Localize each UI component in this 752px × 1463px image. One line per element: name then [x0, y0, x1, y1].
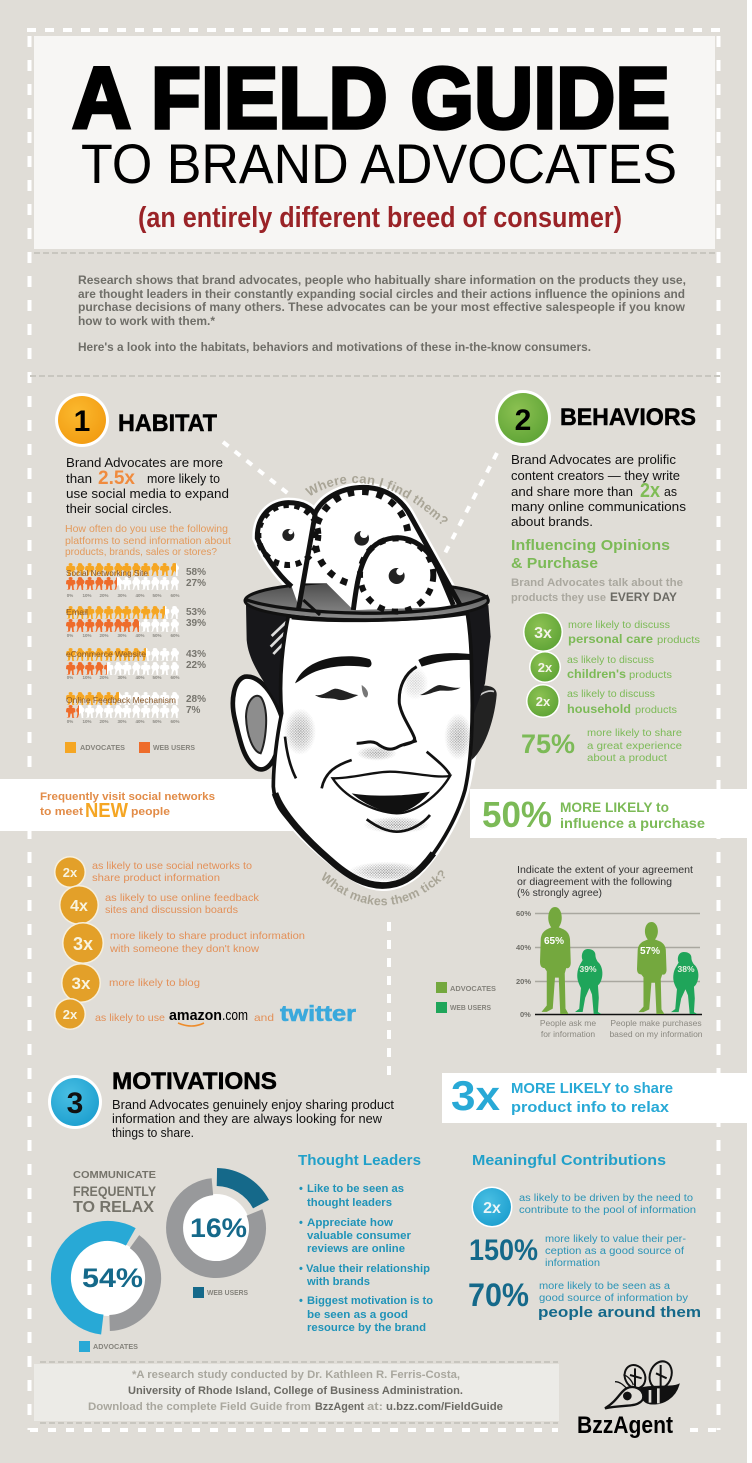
habitat stats list [54, 856, 357, 1030]
legend: advocates: ADVOCATES [93, 1342, 138, 1351]
footer panel: University of Rhode Island, College of Business Administration. [128, 1385, 463, 1397]
thought leaders bullets: • [299, 1217, 303, 1229]
every day text: products they use [511, 592, 606, 604]
stat: 4x feedback [59, 885, 260, 925]
stat: 70 percent: good source of information by [539, 1293, 688, 1304]
donut: advocates 54 percent: 54% [82, 1263, 143, 1293]
pictogram axis ticks: 60% [170, 675, 180, 680]
pictogram chart: email: Email [66, 608, 88, 617]
stat: 3x strangers: 3x [73, 934, 93, 954]
stat: 75 percent [521, 728, 682, 764]
pictogram axis ticks: 60% [170, 633, 180, 638]
behaviors description: 2x [640, 480, 660, 502]
communicate heading: TO RELAX [73, 1199, 154, 1216]
survey question: platforms to send information about [65, 535, 231, 547]
subtitle: (an entirely different breed of consumer) [138, 202, 622, 234]
motivations heading: MOTIVATIONS [112, 1068, 277, 1095]
stat: 2x amazon twitter: 2x [63, 1007, 78, 1022]
icon: number 1: 1 [74, 405, 90, 438]
pictogram chart: email: 53% [186, 607, 206, 618]
stat: 2x social networks: share product information [92, 872, 220, 884]
stat: 3x strangers: with someone they don't know [109, 943, 259, 955]
stat: 2x contribute: contribute to the pool of information [519, 1205, 696, 1216]
behaviors description: and share more than [511, 484, 633, 499]
curved text: what makes them tick: What makes them tick? [322, 870, 445, 906]
chart legend: ADVOCATES [450, 984, 496, 993]
rim front [245, 596, 488, 613]
icon: number 2 [495, 390, 551, 446]
figure: advocates 57 percent [637, 922, 667, 1014]
habitat description: than [66, 471, 92, 486]
pictogram axis ticks: 10% [82, 633, 92, 638]
stat: 3x blog: more likely to blog [109, 977, 200, 989]
figure: advocates 65 percent [540, 907, 571, 1014]
stat: 2x social networks: 2x [63, 865, 78, 880]
pictogram axis ticks: 20% [99, 633, 109, 638]
chart x labels: based on my information [609, 1029, 703, 1039]
every day text: Brand Advocates talk about the [511, 577, 683, 589]
pictogram axis ticks [67, 593, 180, 724]
chart axis labels: 40% [516, 943, 531, 952]
footer panel: BzzAgent [315, 1401, 364, 1413]
thought leaders bullets: thought leaders [307, 1197, 392, 1209]
motivations description: information and they are always looking for new [112, 1112, 383, 1126]
stat: 2x amazon twitter: as likely to use [95, 1012, 165, 1024]
pictogram chart: online feedback: 28% [186, 694, 206, 705]
intro text: Research shows that brand advocates, people who habitually share information on the products they use, [78, 273, 686, 287]
stat: 2x contribute: 2x [483, 1200, 501, 1217]
behaviors description: content creators — they write [511, 468, 680, 483]
callout: 50 percent: MORE LIKELY to [560, 799, 669, 815]
stat: 75 percent: about a product [587, 753, 667, 764]
thought leaders bullets: Value their relationship [306, 1263, 430, 1275]
chart title: (% strongly agree) [517, 888, 602, 899]
gears [257, 487, 460, 615]
stat: 2x children's: as likely to discuss [567, 655, 654, 666]
intro text: purchase decisions of many others. These advocates can be your most effective salespeople if you know [78, 300, 686, 314]
legend: habitat: ADVOCATES [80, 743, 125, 752]
chart axis labels: 60% [516, 909, 531, 918]
illustration: smiling head with gears [233, 487, 497, 887]
pictogram axis ticks: 50% [152, 719, 162, 724]
pictogram chart: social networking [66, 563, 206, 590]
habitat description: more likely to [147, 471, 220, 486]
stat: 2x children's: children's [567, 667, 626, 681]
callout: new people: NEW [85, 800, 128, 822]
chart legend [436, 982, 496, 1013]
section 1 habitat [55, 393, 231, 753]
donut: web users 16 percent [175, 1177, 261, 1298]
right page edge [747, 0, 752, 1463]
thought leaders bullets: be seen as a good [307, 1309, 408, 1321]
pictogram chart: online feedback: Online Feedback Mechanism [66, 696, 176, 705]
intro text [78, 273, 686, 354]
stat: 2x children's: products [629, 670, 672, 681]
stat: 150 percent: more likely to value their per- [545, 1234, 686, 1245]
title panel [34, 36, 715, 249]
nose [399, 667, 417, 745]
behaviors description [511, 452, 687, 529]
chart x labels: for information [541, 1029, 595, 1039]
habitat description: use social media to expand [66, 486, 229, 501]
hair [246, 605, 297, 717]
stat: 3x personal care: personal care [568, 632, 653, 646]
pictogram axis ticks: 60% [170, 593, 180, 598]
chart title [517, 865, 693, 899]
thought leaders bullets: • [299, 1263, 303, 1275]
eyes [315, 689, 358, 700]
callout: new people: to meet [40, 806, 83, 818]
chart title: Indicate the extent of your agreement [517, 865, 693, 876]
open skull interior [245, 581, 488, 620]
pictogram axis ticks: 50% [152, 633, 162, 638]
motivations description [112, 1098, 395, 1140]
callout: 3x relax [451, 1072, 673, 1119]
stat: 2x household: as likely to discuss [567, 689, 655, 700]
stat: 75 percent: more likely to share [587, 728, 682, 739]
pictogram axis ticks: 10% [82, 719, 92, 724]
stat: 3x personal care [523, 612, 700, 652]
pictogram chart: social networking: 58% [186, 567, 206, 578]
pictogram chart: email [66, 606, 206, 632]
chart axis labels: 20% [516, 977, 531, 986]
stat: 2x amazon twitter: amazon [169, 1007, 222, 1024]
habitat heading: HABITAT [118, 410, 217, 437]
habitat description: 2.5x [98, 468, 135, 489]
callout: 50 percent [482, 794, 705, 835]
hair stripes [271, 620, 292, 654]
callout: 50 percent: 50% [482, 794, 552, 835]
thought leaders bullets: with brands [306, 1276, 370, 1288]
stat: 2x social networks: as likely to use social networks to [92, 860, 252, 872]
pictogram axis ticks: 30% [117, 593, 127, 598]
motivations description: things to share. [112, 1126, 194, 1140]
chart legend: WEB USERS [450, 1003, 491, 1012]
communicate heading: FREQUENTLY [73, 1183, 157, 1199]
stat: 4x feedback: sites and discussion boards [105, 904, 238, 916]
thought leaders bullets [299, 1183, 433, 1334]
behaviors description: about brands. [511, 514, 593, 529]
stat: 2x amazon twitter: twitter [280, 1001, 357, 1026]
meaningful contributions [468, 1152, 701, 1321]
footer panel: *A research study conducted by Dr. Kathleen R. Ferris-Costa, [132, 1369, 460, 1381]
stat: 4x feedback: 4x [70, 898, 88, 915]
figure: web users 39 percent: 39% [579, 964, 597, 974]
thought leaders [298, 1152, 433, 1334]
pictogram axis ticks: 10% [82, 675, 92, 680]
chart x labels: People ask me [540, 1018, 596, 1028]
stat: 2x contribute [472, 1186, 696, 1228]
pictogram axis ticks: 50% [152, 675, 162, 680]
figure: web users 38 percent: 38% [677, 964, 695, 974]
pictogram axis ticks: 40% [135, 719, 145, 724]
stat: 150 percent [469, 1234, 686, 1269]
meaningful heading: Meaningful Contributions [472, 1152, 666, 1169]
pictogram axis ticks: 20% [99, 593, 109, 598]
stat: 2x amazon twitter: and [254, 1012, 274, 1024]
callout: 50 percent: influence a purchase [560, 815, 705, 831]
mouth [333, 772, 450, 813]
stat: 3x personal care: 3x [534, 625, 552, 642]
stat: 2x children's: 2x [538, 660, 553, 675]
callout: 3x relax: product info to relax [511, 1099, 670, 1116]
stat: 4x feedback: as likely to use online feedback [105, 892, 260, 904]
stat: 2x social networks [54, 856, 252, 888]
icon: number 2: 2 [515, 404, 531, 437]
figure: web users 38 percent [671, 952, 698, 1014]
stat: 2x household: household [567, 702, 631, 716]
thought leaders heading: Thought Leaders [298, 1152, 421, 1169]
stat: 2x household: 2x [536, 694, 551, 709]
pictogram axis ticks: 30% [117, 675, 127, 680]
survey question: How often do you use the following [65, 523, 228, 535]
stat: 3x strangers [62, 922, 305, 964]
pictogram axis ticks: 20% [99, 675, 109, 680]
icon: bee [605, 1358, 678, 1408]
pictogram axis ticks: 0% [67, 719, 73, 724]
section 3 motivations [48, 1068, 395, 1140]
behaviors description: as [664, 484, 677, 499]
pictogram axis ticks: 0% [67, 633, 73, 638]
pictogram chart: ecommerce [66, 648, 206, 675]
survey question: products, brands, sales or stores? [65, 546, 217, 558]
pictogram chart: ecommerce: 43% [186, 649, 206, 660]
title second line: TO BRAND ADVOCATES [81, 132, 677, 195]
intro text: are thought leaders in their constantly expanding social circles and their actions influence the opinions and [78, 287, 685, 301]
curved text: where can I find them: Where can I find them? [304, 476, 448, 524]
thought leaders bullets: Biggest motivation is to [307, 1295, 433, 1307]
stat: 70 percent: people around them [538, 1304, 701, 1321]
pictogram chart: social networking: 27% [186, 578, 206, 589]
stat: 2x contribute: as likely to be driven by the need to [519, 1193, 693, 1204]
pictogram chart: online feedback: 7% [186, 705, 201, 716]
chart axis labels [516, 909, 531, 1019]
chart grid [535, 914, 700, 982]
logo: BzzAgent [577, 1358, 678, 1439]
callout: new people [40, 791, 215, 822]
every day text [511, 577, 683, 604]
figure: web users 39 percent [575, 949, 602, 1014]
communicate heading [73, 1169, 157, 1216]
pictogram axis ticks: 0% [67, 593, 73, 598]
legend: habitat: WEB USERS [153, 743, 195, 752]
figure: advocates 57 percent: 57% [640, 946, 660, 957]
callout: 3x relax: MORE LIKELY to share [511, 1080, 673, 1097]
icon: number 3 [48, 1075, 102, 1129]
stat: 2x household: products [635, 705, 677, 716]
thought leaders bullets: reviews are online [307, 1243, 405, 1255]
white halo around face [273, 717, 478, 887]
chart axis labels: 0% [520, 1010, 531, 1019]
chart x labels [540, 1018, 703, 1039]
intro text: Here's a look into the habitats, behaviors and motivations of these in-the-know consumers. [78, 340, 591, 354]
stat: 3x strangers: more likely to share product information [110, 930, 305, 942]
habitat description: Brand Advocates are more [66, 455, 223, 470]
white band motivations [442, 1073, 752, 1123]
legend: web users: WEB USERS [207, 1288, 248, 1297]
stat: 70 percent: 70% [468, 1277, 529, 1313]
stat: 3x blog [61, 963, 200, 1003]
pictogram axis ticks: 40% [135, 675, 145, 680]
stat: 2x children's [529, 651, 672, 683]
stat: 150 percent: information [545, 1258, 600, 1269]
thought leaders bullets: • [299, 1295, 303, 1307]
pictogram chart: online feedback [66, 692, 206, 718]
pictogram chart: ecommerce: eCommerce Website [66, 650, 147, 659]
pictogram axis ticks: 40% [135, 633, 145, 638]
thought leaders bullets: Like to be seen as [307, 1183, 404, 1195]
stat: 2x amazon twitter: .com [222, 1007, 248, 1024]
stat: 150 percent: ception as a good source of [545, 1246, 684, 1257]
pictogram axis ticks: 0% [67, 675, 73, 680]
logo wordmark: BzzAgent [577, 1412, 673, 1439]
bar chart: agreement [436, 865, 703, 1039]
habitat description [66, 455, 229, 516]
pictogram chart: ecommerce: 22% [186, 660, 206, 671]
pictogram axis ticks: 60% [170, 719, 180, 724]
communicate heading: COMMUNICATE [73, 1169, 156, 1181]
stat: 70 percent: more likely to be seen as a [539, 1281, 670, 1292]
pictogram chart: social networking: Social Networking Site [66, 569, 149, 578]
footer panel: Download the complete Field Guide from [88, 1401, 311, 1413]
stat: 150 percent: 150% [469, 1234, 538, 1267]
pictogram axis ticks: 50% [152, 593, 162, 598]
behaviors description: Brand Advocates are prolific [511, 452, 676, 467]
face [273, 613, 472, 887]
behaviors description: many online communications [511, 499, 687, 514]
stat: 3x personal care: products [657, 635, 700, 646]
thought leaders bullets: • [299, 1183, 303, 1195]
thought leaders bullets: Appreciate how [307, 1217, 393, 1229]
icon: number 1 [55, 393, 109, 447]
pictogram chart: email: 39% [186, 618, 206, 629]
donut: web users 16 percent: 16% [190, 1213, 247, 1243]
callout: new people: people [131, 806, 170, 818]
stat: 70 percent [468, 1277, 701, 1321]
white band left [0, 779, 300, 831]
every day text: EVERY DAY [610, 590, 677, 604]
thought leaders bullets: valuable consumer [307, 1230, 412, 1242]
influencing heading: Influencing Opinions [511, 537, 670, 554]
stat: 2x household [526, 684, 677, 718]
footer panel [34, 1364, 559, 1421]
smile lines [285, 737, 450, 832]
stat: 3x personal care: more likely to discuss [568, 620, 670, 631]
right ear [472, 686, 497, 760]
figure: advocates 65 percent: 65% [544, 936, 564, 947]
chin shadow outline [275, 793, 433, 886]
chart x labels: People make purchases [610, 1018, 702, 1028]
eyebrows [295, 656, 372, 683]
habitat description: their social circles. [66, 501, 172, 516]
icon: number 3: 3 [67, 1087, 83, 1120]
pictogram axis ticks: 40% [135, 593, 145, 598]
pictogram axis ticks: 30% [117, 633, 127, 638]
footer panel: u.bzz.com/FieldGuide [386, 1401, 503, 1413]
stat: 2x amazon twitter [54, 998, 357, 1030]
intro text: how to work with them.* [78, 314, 215, 328]
behaviors heading: BEHAVIORS [560, 404, 696, 431]
pictogram axis ticks: 30% [117, 719, 127, 724]
pictogram axis ticks: 10% [82, 593, 92, 598]
main title: A FIELD GUIDE [72, 50, 670, 147]
cheek shading [284, 667, 472, 882]
motivations description: Brand Advocates genuinely enjoy sharing product [112, 1098, 395, 1112]
white band right [470, 789, 752, 838]
chart title: or diagreement with the following [517, 877, 672, 888]
legend: habitat [65, 742, 195, 753]
influencing heading: & Purchase [511, 555, 598, 572]
section 2 behaviors [495, 390, 700, 764]
survey question [65, 523, 231, 558]
white halo around gears [257, 487, 460, 605]
callout: 3x relax: 3x [451, 1072, 501, 1119]
left ear [233, 677, 282, 769]
thought leaders bullets: resource by the brand [307, 1322, 426, 1334]
donut: advocates 54 percent [61, 1231, 153, 1352]
stat: 75 percent: 75% [521, 729, 575, 759]
pictogram axis ticks: 20% [99, 719, 109, 724]
stat: 3x blog: 3x [72, 974, 91, 993]
callout: new people: Frequently visit social networks [40, 791, 215, 803]
stat: 75 percent: a great experience [587, 741, 682, 752]
footer panel: at: [367, 1401, 383, 1413]
influencing heading [511, 537, 670, 572]
